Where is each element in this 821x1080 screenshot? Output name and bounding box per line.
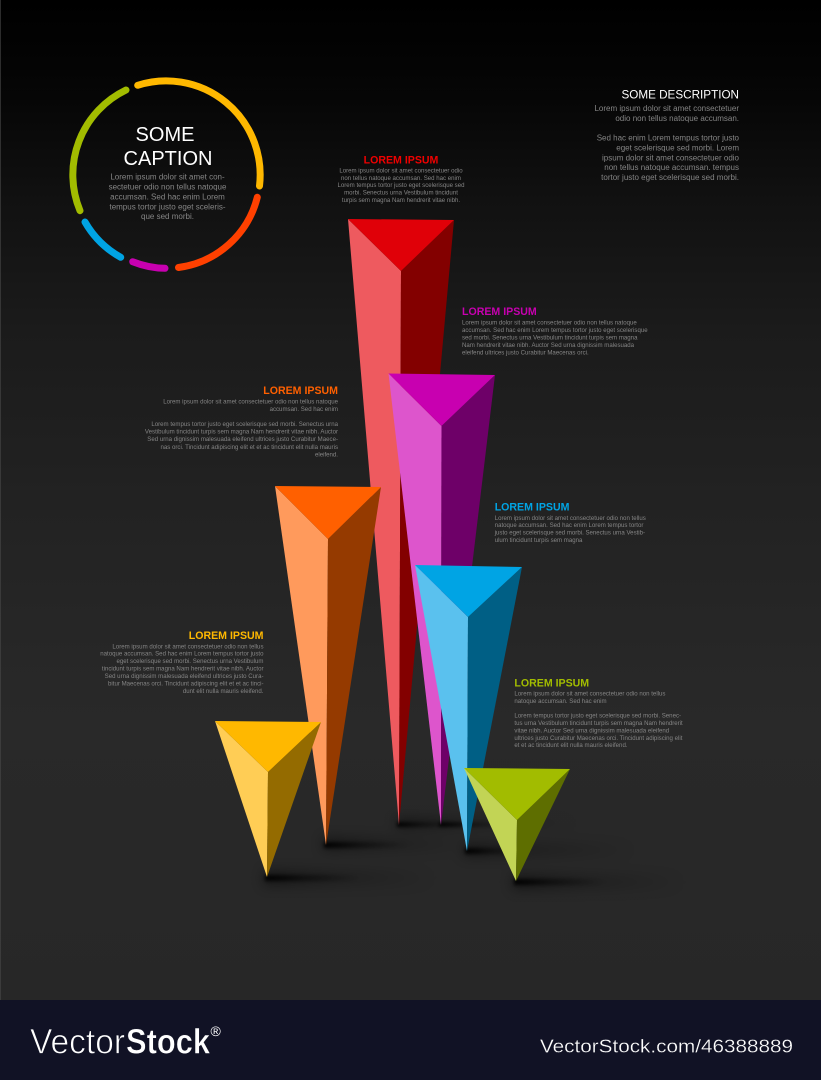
description: ipsum dolor sit amet consectetuer odio [602, 153, 740, 162]
red label: morbi. Senectus urna Vestibulum tincidunt [344, 190, 458, 197]
blue label: natoque accumsan. Sed hac enim Lorem tempus tortor [495, 522, 643, 529]
magenta label: Nam hendrerit vitae nibh. Auctor Sed urna dignissim malesuada [462, 342, 635, 349]
ring segment: green [73, 90, 126, 211]
green label: tus urna Vestibulum tincidunt turpis sem magna Nam hendrerit [514, 720, 683, 727]
circular caption ring [73, 81, 260, 268]
blue label: Lorem ipsum dolor sit amet consectetuer odio non tellus [495, 515, 646, 522]
green label: natoque accumsan. Sed hac enim [514, 698, 607, 705]
pyramid: blue [415, 565, 522, 851]
green label: Lorem tempus tortor justo eget scelerisque sed morbi. Senec- [514, 712, 681, 720]
red label: Lorem tempus tortor justo eget scelerisque sed [337, 182, 465, 189]
description: tortor justo eget scelerisque sed morbi. [601, 173, 739, 182]
magenta label: Lorem ipsum dolor sit amet consectetuer odio non tellus natoque [462, 319, 637, 326]
green label: LOREM IPSUM [514, 677, 589, 689]
caption heading [124, 124, 212, 170]
description: non tellus natoque accumsan. tempus [604, 163, 739, 172]
magenta label: LOREM IPSUM [462, 306, 537, 318]
red label: non tellus natoque accumsan. Sed hac enim [341, 175, 461, 182]
caption text: sectetuer odio non tellus natoque [109, 182, 227, 192]
yellow label [100, 630, 264, 695]
orange label: Lorem tempus tortor justo eget scelerisque sed morbi. Senectus urna [151, 421, 339, 428]
green label: ultrices justo Curabitur Maecenas orci. Tincidunt adipiscing elit [514, 735, 683, 742]
orange label [145, 385, 339, 458]
ring segment: orange [178, 197, 257, 268]
yellow label: tincidunt turpis sem magna Nam hendrerit vitae nibh. Auctor [102, 666, 264, 673]
orange label: nas orci. Tincidunt adipiscing elit et et ac tincidunt elit nulla mauris [160, 444, 338, 451]
caption heading: CAPTION [124, 148, 212, 170]
caption text: accumsan. Sed hac enim Lorem [110, 192, 225, 202]
green label: vitae nibh. Auctor Sed urna dignissim malesuada eleifend [514, 727, 669, 734]
magenta label: accumsan. Sed hac enim Lorem tempus tortor justo eget scelerisque [462, 327, 648, 334]
ring segment: magenta [133, 262, 165, 268]
orange label: eleifend. [315, 451, 338, 458]
description: Lorem ipsum dolor sit amet consectetuer [594, 104, 739, 113]
green label: et et ac tincidunt elit nulla mauris eleifend. [514, 742, 628, 749]
red label [337, 154, 465, 204]
yellow label: bitur Maecenas orci. Tincidunt adipiscing elit et et ac tinci- [108, 680, 264, 687]
magenta label [462, 306, 648, 356]
red label: turpis sem magna Nam hendrerit vitae nibh. [342, 197, 460, 204]
orange label: Sed urna dignissim malesuada eleifend ultrices justo Curabitur Maece- [147, 436, 338, 443]
footer band [0, 1000, 821, 1080]
footer logo: Vector [30, 1021, 125, 1061]
description: odio non tellus natoque accumsan. [615, 114, 739, 123]
yellow label: natoque accumsan. Sed hac enim Lorem tempus tortor justo [100, 651, 264, 658]
yellow label: LOREM IPSUM [189, 630, 264, 642]
blue label: justo eget scelerisque sed morbi. Senectus urna Vestib- [494, 530, 645, 537]
orange label: Lorem ipsum dolor sit amet consectetuer odio non tellus natoque [163, 399, 339, 406]
ring segment: blue [85, 222, 121, 257]
soft shadow halos [264, 818, 683, 889]
yellow label: Sed urna dignissim malesuada eleifend ultrices justo Cura- [105, 673, 264, 680]
pyramid: green [464, 768, 570, 881]
orange label: LOREM IPSUM [263, 385, 338, 397]
yellow label: Lorem ipsum dolor sit amet consectetuer odio non tellus [112, 643, 264, 650]
footer url: VectorStock.com/46388889 [540, 1036, 793, 1056]
pyramid: orange [275, 486, 381, 845]
caption text: que sed morbi. [141, 212, 194, 221]
caption heading: SOME [136, 124, 194, 146]
pyramid: red [348, 219, 454, 825]
red label: Lorem ipsum dolor sit amet consectetuer odio [339, 167, 463, 174]
footer logo: ® [210, 1023, 222, 1039]
caption text: Lorem ipsum dolor sit amet con- [110, 172, 225, 182]
red label: LOREM IPSUM [364, 154, 439, 166]
blue label: ulum tincidunt turpis sem magna [495, 537, 583, 544]
caption text [109, 172, 227, 221]
blue label: LOREM IPSUM [495, 502, 570, 514]
orange label: Vestibulum tincidunt turpis sem magna Nam hendrerit vitae nibh. Auctor [145, 429, 338, 436]
orange label: accumsan. Sed hac enim [270, 406, 338, 413]
description: SOME DESCRIPTION [621, 88, 739, 102]
magenta label: eleifend ultrices justo Curabitur Maecenas orci. [462, 349, 589, 356]
footer logo [30, 1021, 222, 1061]
green label [514, 677, 683, 749]
green label: Lorem ipsum dolor sit amet consectetuer odio non tellus [514, 690, 665, 697]
yellow label: eget scelerisque sed morbi. Senectus urna Vestibulum [116, 658, 264, 665]
description: eget scelerisque sed morbi. Lorem [616, 144, 739, 152]
footer logo: Stock [126, 1021, 210, 1061]
description [594, 88, 740, 182]
ring segment: yellow [138, 81, 260, 186]
shadows under pyramids [265, 822, 604, 885]
magenta label: sed morbi. Senectus urna Vestibulum tincidunt turpis sem magna [462, 334, 638, 341]
description: Sed hac enim Lorem tempus tortor justo [597, 134, 740, 142]
blue label [494, 502, 646, 544]
yellow label: dunt elit nulla mauris eleifend. [183, 688, 264, 695]
caption text: tempus tortor justo eget sceleris- [109, 202, 226, 211]
pyramid: magenta [388, 374, 495, 825]
pyramid: yellow [215, 721, 321, 877]
